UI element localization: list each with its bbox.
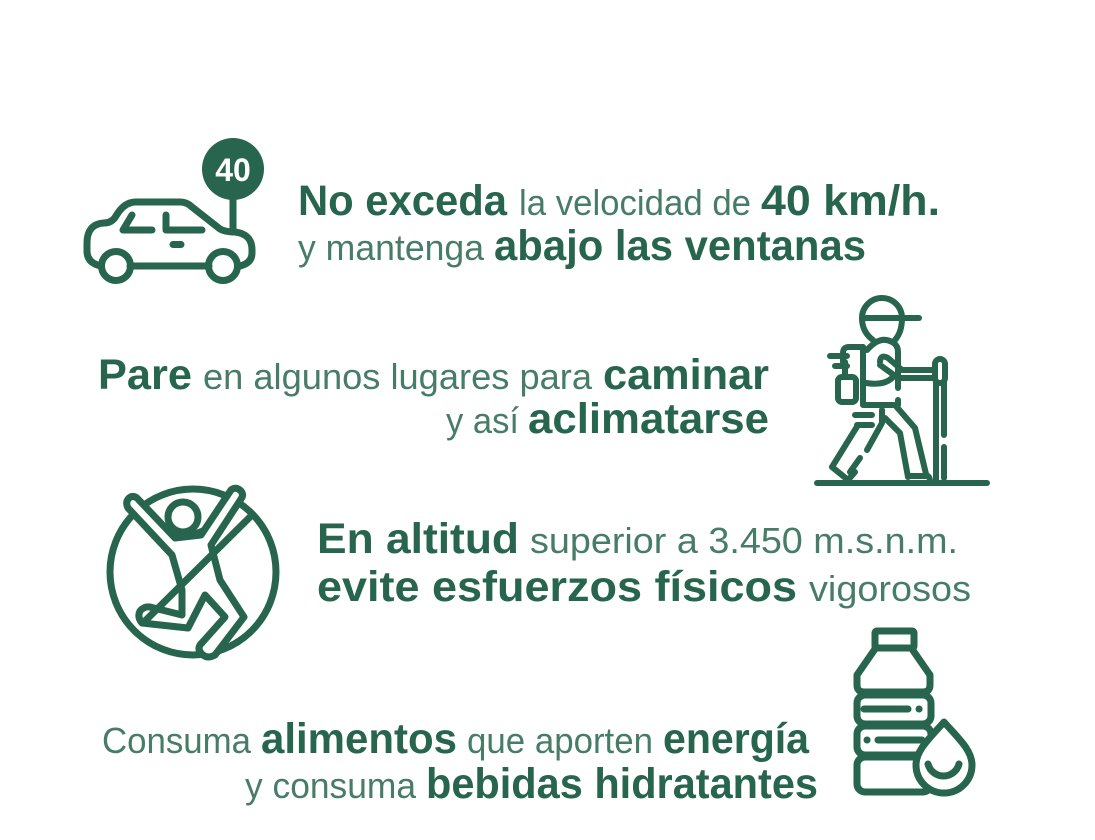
text: stop and walk recommendation: Pare [98,351,192,399]
text: speed limit recommendation [298,177,940,270]
text: food and drink recommendation: energía [663,715,810,763]
text: altitude recommendation: superior a 3.450 m.s.n.m. [530,520,958,561]
text: altitude recommendation [317,515,971,611]
text: speed limit recommendation: abajo las ventanas [494,222,866,270]
text: food and drink recommendation: que aporten [467,720,653,761]
text: food and drink recommendation: y consuma [245,765,417,806]
icon: hiker [817,298,987,483]
text: altitude recommendation: vigorosos [809,568,971,609]
text: altitude recommendation: En altitud [317,515,519,563]
icon: water bottle with drop [857,631,972,793]
text: speed limit recommendation: 40 km/h. [761,177,940,225]
text: speed limit recommendation: la velocidad de [519,182,751,223]
text: stop and walk recommendation: en algunos lugares para [203,356,593,397]
text: stop and walk recommendation [98,351,769,443]
text: stop and walk recommendation: caminar [603,351,769,399]
text: stop and walk recommendation: y así [446,400,519,441]
icon: person exercising crossed out [110,488,276,657]
text: food and drink recommendation: bebidas hidratantes [426,760,818,808]
text: food and drink recommendation: Consuma [102,720,252,761]
text: food and drink recommendation [102,715,818,808]
text: speed limit recommendation: No exceda [298,177,508,225]
text: stop and walk recommendation: aclimatarse [528,395,769,443]
icon: car with 40 speed sign [87,138,264,280]
text: altitude recommendation: evite esfuerzos físicos [317,563,797,611]
icon: car with 40 speed sign: 40 [215,152,251,188]
text: speed limit recommendation: y mantenga [298,227,485,268]
text: food and drink recommendation: alimentos [261,715,457,763]
